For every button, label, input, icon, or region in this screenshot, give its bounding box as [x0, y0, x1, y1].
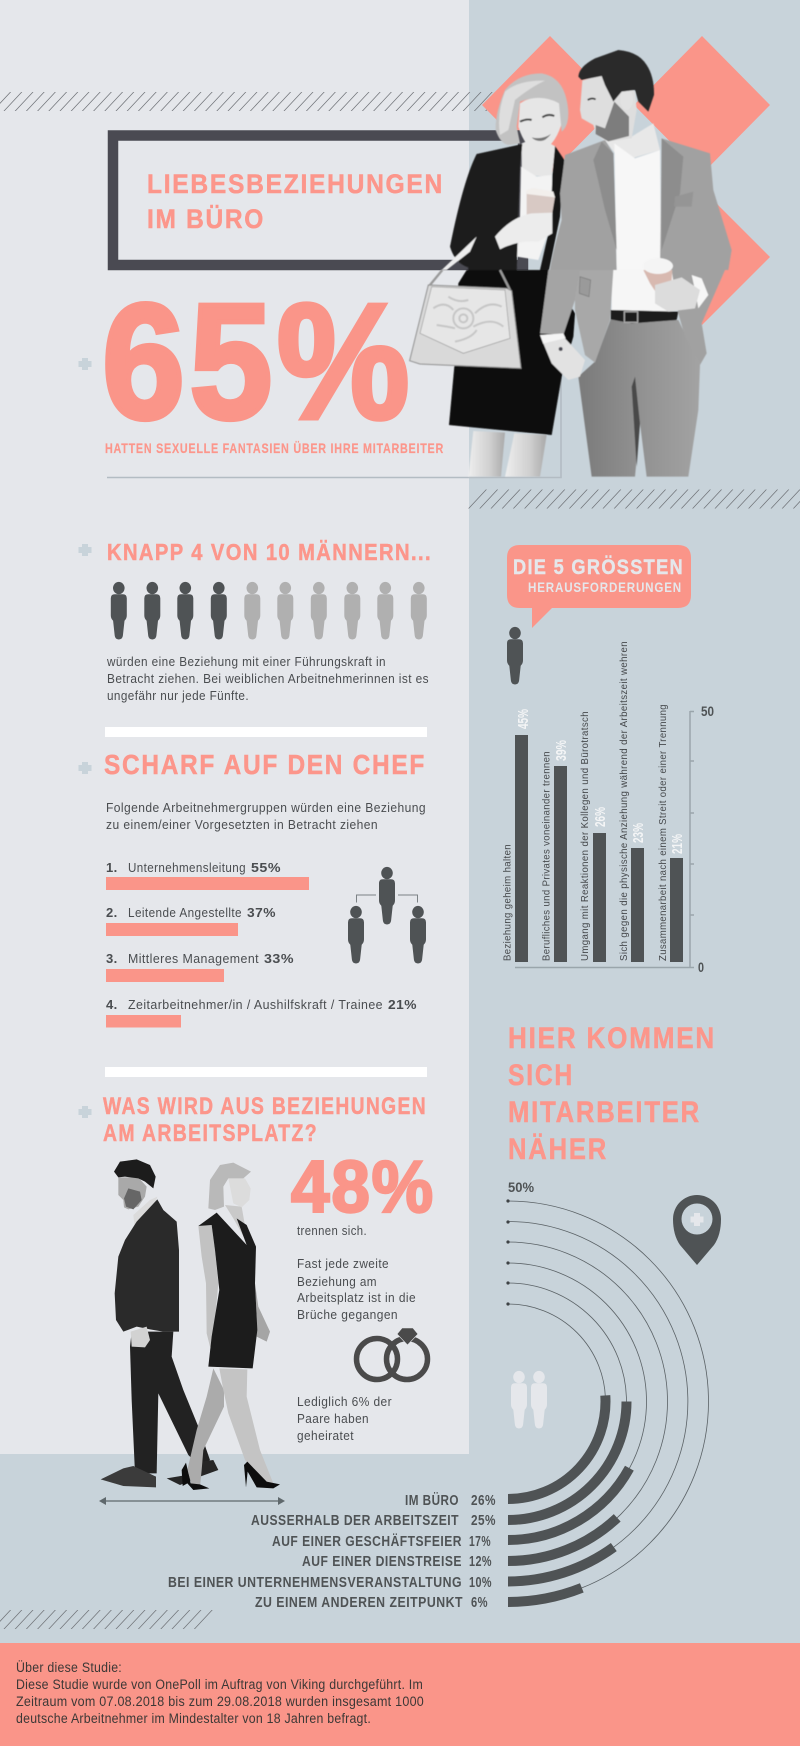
heading: Was wird aus Beziehungen: AM ARBEITSPLATZ? [103, 1120, 318, 1147]
rotated labels [502, 641, 669, 961]
thin arcs [508, 1201, 708, 1602]
plus icon [78, 544, 92, 556]
rotated labels: Zusammenarbeit nach einem Streit oder einer Trennung [657, 704, 669, 961]
labels: radial chart: BEI EINER UNTERNEHMENSVERANSTALTUNG [168, 1575, 462, 1591]
labels: radial chart: 26% [471, 1493, 496, 1509]
labels: radial chart: 10% [469, 1575, 492, 1591]
arrow: double-headed [99, 1497, 285, 1505]
text: geheiratet: Lediglich 6% der [297, 1394, 392, 1409]
dots [506, 1199, 510, 1306]
text: geheiratet: geheiratet [297, 1428, 354, 1443]
big number 48%: 48% [291, 1147, 435, 1228]
row 2: 2. [106, 905, 118, 920]
labels: radial chart: 6% [471, 1595, 488, 1611]
icon: location pin [673, 1195, 721, 1265]
axis [515, 711, 694, 968]
speech bubble: HERAUSFORDERUNGEN [528, 579, 682, 595]
row 3: Mittleres Management [128, 951, 259, 966]
text: trennen sich: Brüche gegangen [297, 1307, 398, 1322]
text: trennen sich: Arbeitsplatz ist in die [297, 1290, 416, 1305]
title: LIEBESBEZIEHUNGEN [147, 169, 444, 199]
title [147, 169, 444, 234]
text: trennen sich [297, 1223, 416, 1322]
bar chart: challenges: 0 [698, 959, 704, 975]
footer band [0, 1643, 800, 1746]
icon: wedding rings [356, 1328, 428, 1380]
heading: Was wird aus Beziehungen: WAS WIRD AUS BEZIEHUNGEN [103, 1093, 427, 1120]
footer text [16, 1660, 424, 1726]
photo: couple [410, 50, 732, 477]
bar chart: challenges: 50 [701, 703, 714, 719]
row 1: 1. [106, 860, 118, 875]
row 2 [106, 905, 276, 936]
handbag [410, 285, 521, 368]
footer text: Über diese Studie: [16, 1660, 122, 1675]
man upper body [550, 50, 732, 270]
text: Arbeitnehmergruppen [106, 800, 426, 832]
labels: radial chart: AUF EINER DIENSTREISE [302, 1554, 462, 1570]
rotated labels: Beziehung geheim halten [502, 844, 514, 961]
labels: radial chart: 17% [469, 1534, 491, 1550]
percent values: 45% [515, 709, 532, 729]
percent values: 39% [553, 740, 570, 761]
scale label: 50% [508, 1179, 535, 1195]
text: Arbeitnehmergruppen: zu einem/einer Vorgesetzten in Betracht ziehen [106, 817, 378, 832]
speech bubble: DIE 5 GRÖSSTEN [513, 556, 684, 579]
labels: radial chart: 25% [471, 1513, 496, 1529]
radial bar chart: where colleagues get closer [506, 1179, 708, 1602]
row 4 [106, 997, 417, 1028]
decorative pink diamonds [482, 36, 770, 325]
labels: radial chart: AUF EINER GESCHÄFTSFEIER [272, 1533, 462, 1550]
row 1: Unternehmensleitung [128, 860, 246, 875]
heading: Hier kommen sich Mitarbeiter näher: NÄHER [508, 1133, 608, 1166]
woman skirt and legs [468, 431, 505, 477]
labels: radial chart: ZU EINEM ANDEREN ZEITPUNKT [255, 1595, 463, 1611]
text: Knapp 4 von 10 [106, 654, 429, 703]
row 3: 33% [264, 951, 294, 966]
heading: Scharf auf den Chef: SCHARF AUF DEN CHEF [104, 749, 426, 780]
text: geheiratet [297, 1394, 392, 1443]
photo: couple walking apart [101, 1159, 280, 1490]
row 1: 55% [251, 860, 281, 875]
percent values [515, 709, 686, 854]
text: trennen sich: trennen sich. [297, 1223, 367, 1238]
heading: Knapp 4 von 10 Männern: KNAPP 4 VON 10 MÄNNERN... [107, 539, 432, 565]
labels: radial chart: 12% [469, 1554, 492, 1570]
rotated labels: Berufliches und Privates voneinander trennen [540, 751, 552, 961]
icon: person [507, 627, 523, 684]
heading: Was wird aus Beziehungen [103, 1093, 427, 1147]
percent values: 26% [592, 807, 609, 827]
row 4: 4. [106, 997, 118, 1012]
plus icon [78, 1106, 92, 1118]
footer text: deutsche Arbeitnehmer im Mindestalter von 18 Jahren befragt. [16, 1711, 371, 1726]
rotated labels: Umgang mit Reaktionen der Kollegen und Bürotratsch [579, 711, 591, 961]
title frame [113, 136, 523, 265]
text: trennen sich: Fast jede zweite [297, 1256, 389, 1271]
footer text: Zeitraum vom 07.08.2018 bis zum 29.08.2018 wurden insgesamt 1000 [16, 1694, 424, 1709]
row 4: Zeitarbeitnehmer/in / Aushilfskraft / Trainee [128, 997, 383, 1012]
rotated labels: Sich gegen die physische Anziehung während der Arbeitszeit wehren [618, 641, 630, 961]
woman upper body [442, 73, 568, 270]
man lower body [578, 319, 700, 477]
thick arcs [508, 1395, 629, 1602]
row 3 [106, 951, 294, 982]
heading: Hier kommen sich Mitarbeiter näher: SICH [508, 1059, 574, 1092]
footer text: Diese Studie wurde von OnePoll im Auftrag von Viking durchgeführt. Im [16, 1677, 423, 1692]
heading: Hier kommen sich Mitarbeiter näher [508, 1022, 716, 1166]
subline: HATTEN SEXUELLE FANTASIEN ÜBER IHRE MITARBEITER [105, 440, 444, 456]
text: trennen sich: Beziehung am [297, 1274, 377, 1289]
icon: two people [511, 1371, 547, 1428]
text: Knapp 4 von 10: Betracht ziehen. Bei weiblichen Arbeitnehmerinnen ist es [107, 671, 429, 686]
pictogram: 10 people [111, 582, 427, 639]
text: geheiratet: Paare haben [297, 1411, 369, 1426]
man [101, 1159, 218, 1487]
text: Knapp 4 von 10: würden eine Beziehung mit einer Führungskraft in [106, 654, 386, 669]
plus icon [78, 358, 92, 370]
big number 65%: 65% [102, 270, 414, 453]
heading: Hier kommen sich Mitarbeiter näher: MITARBEITER [508, 1096, 701, 1129]
icon: hierarchy [348, 867, 426, 963]
frame line [107, 349, 561, 478]
row 2: 37% [247, 905, 276, 920]
row 1 [106, 860, 309, 890]
text: Knapp 4 von 10: ungefähr nur jede Fünfte. [107, 688, 249, 703]
labels: radial chart: AUSSERHALB DER ARBEITSZEIT [251, 1513, 459, 1529]
speech bubble [507, 545, 691, 628]
text: Arbeitnehmergruppen: Folgende Arbeitnehmergruppen würden eine Beziehung [106, 800, 426, 815]
percent values: 23% [630, 823, 647, 843]
labels: radial chart: IM BÜRO [405, 1492, 459, 1509]
row 2: Leitende Angestellte [128, 905, 242, 920]
heading: Hier kommen sich Mitarbeiter näher: HIER KOMMEN [508, 1022, 716, 1055]
bar list: employee groups [106, 860, 417, 1028]
row 3: 3. [106, 951, 118, 966]
plus icon [78, 762, 92, 774]
bars [515, 735, 683, 962]
labels: radial chart [168, 1492, 496, 1611]
percent values: 21% [669, 834, 686, 854]
bar chart: challenges [502, 641, 714, 975]
row 4: 21% [388, 997, 417, 1012]
title: IM BÜRO [147, 204, 265, 234]
background: left panel [0, 0, 469, 1454]
woman [182, 1163, 280, 1490]
